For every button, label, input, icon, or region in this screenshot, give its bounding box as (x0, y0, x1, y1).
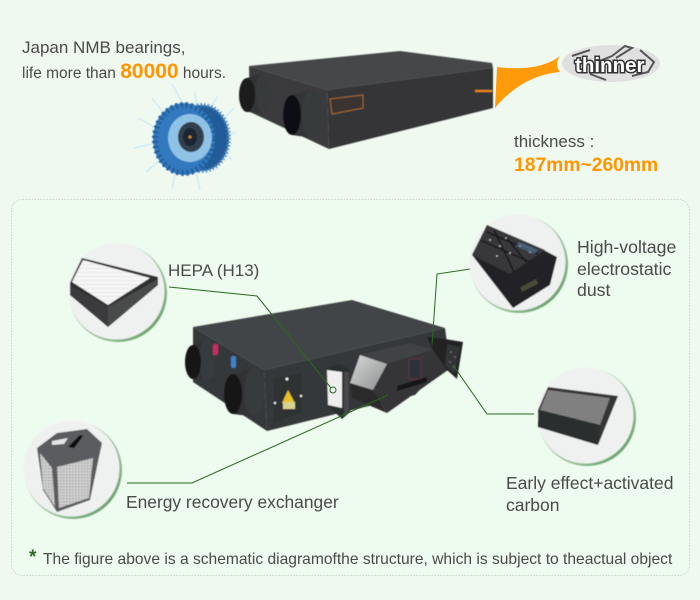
duct: right (224, 368, 264, 417)
badge: thinner (562, 45, 660, 82)
color badges (213, 344, 236, 368)
text: electrostatic: High-voltage (577, 237, 676, 257)
icon: thinner funnel (495, 56, 560, 108)
text: thickness (514, 132, 658, 176)
text: thickness: 187mm~260mm (514, 155, 658, 176)
badge: thinner: thinner (575, 54, 644, 77)
orange mark (475, 90, 492, 92)
electrostatic filter pulled out (427, 337, 463, 379)
text: carbon (506, 473, 673, 515)
text: carbon: Early effect+activated (506, 473, 673, 493)
service door with warning (273, 373, 302, 423)
duct: left (185, 339, 215, 381)
text: electrostatic: dust (577, 280, 611, 300)
footnote: The figure above is a schematic diagramofthe structure, which is subject to theactual object (43, 551, 673, 568)
HEPA cartridge (327, 364, 350, 419)
panel: structure diagram (12, 200, 690, 576)
callout: carbon image (538, 368, 636, 466)
text: thickness: thickness : (514, 132, 594, 151)
text: exchanger: Energy recovery exchanger (126, 492, 339, 512)
callout: electrostatic image (470, 214, 568, 313)
text: electrostatic (577, 237, 676, 300)
heading: bearings text: Japan NMB bearings, (22, 38, 185, 57)
product: top ventilation unit (239, 51, 493, 149)
leader lines (127, 269, 534, 483)
callout: exchanger image (24, 420, 122, 519)
callout: HEPA image (68, 244, 167, 342)
exchanger body (350, 343, 448, 413)
duct: left (239, 73, 270, 113)
text: carbon: carbon (506, 495, 560, 515)
diagram: main unit (185, 300, 463, 431)
icon: blue fan (134, 84, 236, 190)
footnote: * (29, 547, 37, 568)
duct: right (283, 90, 322, 138)
label plate (330, 95, 363, 114)
heading: bearings text (22, 38, 226, 83)
heading: bearings text: life more than 80000 hours. (22, 60, 226, 83)
text: HEPA: HEPA (H13) (168, 261, 259, 280)
text: electrostatic: electrostatic (577, 259, 672, 279)
